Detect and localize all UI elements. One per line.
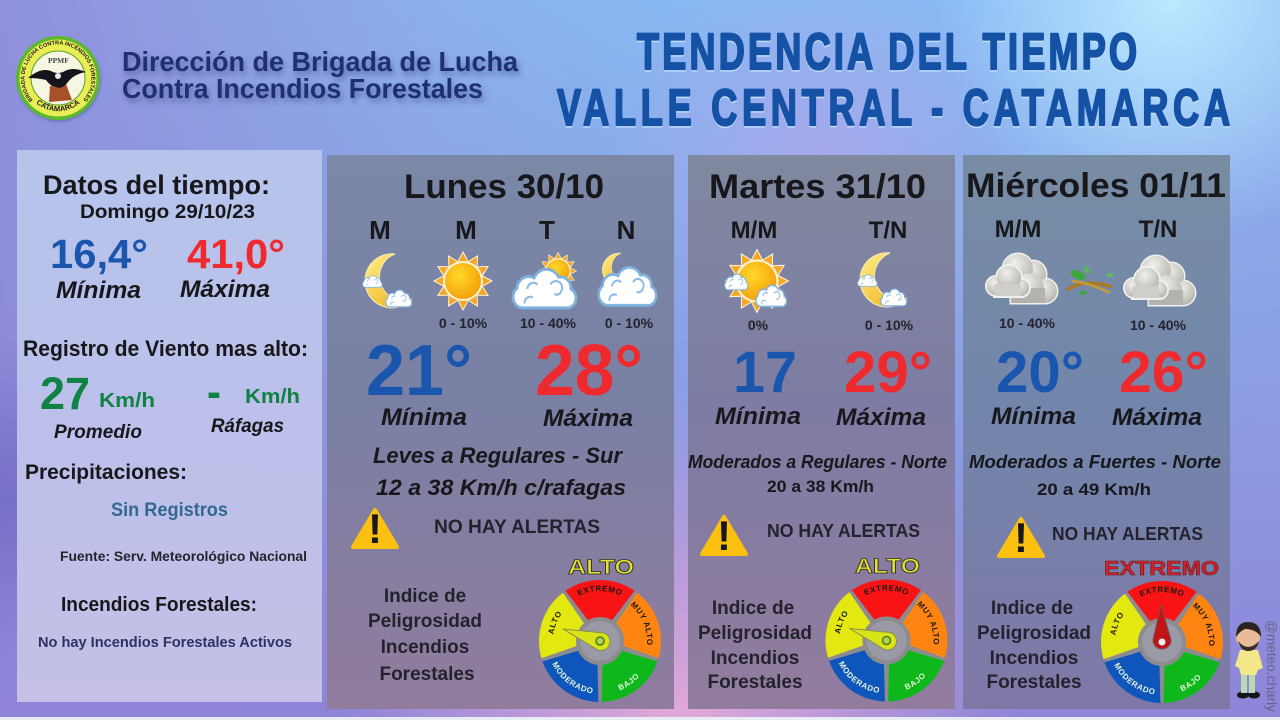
forest fires: No hay Incendios Forestales Activos [38,634,292,651]
maximum temperature: 26° [1119,340,1208,405]
heading: miercoles: Miércoles 01/11 [966,167,1226,205]
gauge: extremo [1101,558,1223,703]
alert: NO HAY ALERTAS [434,517,600,538]
fire danger label: Incendios [711,648,799,669]
alert: NO HAY ALERTAS [767,521,920,541]
minimum temperature: 17 [733,340,797,405]
icon: warning [702,512,746,559]
minimum temperature: Mínima [715,403,801,430]
period labels: T/N [869,217,907,244]
gauge: alto: BAJO [904,674,925,690]
minimum temperature: Mínima [56,277,141,304]
gauge: alto: MUY ALTO [917,601,940,644]
wind forecast: Moderados a Fuertes - Norte [969,452,1221,472]
minimum temperature: Mínima [991,403,1076,430]
gauge: alto: ALTO [548,612,561,634]
maximum temperature [1112,340,1208,431]
maximum temperature [836,340,932,431]
gauge needle [850,628,897,650]
wind forecast: 12 a 38 Km/h c/rafagas [376,475,626,500]
heading: organisation: Contra Incendios Forestales [124,77,485,108]
fire danger label: Peligrosidad [977,623,1091,644]
icon: cloud and sun [513,252,577,308]
minimum temperature: Mínima [381,404,467,431]
forest fires: Incendios Forestales: [61,594,257,616]
period labels: M [369,215,391,245]
period labels: T [539,215,555,245]
rain probabilities: 0% [748,317,769,333]
gauge: alto: BAJO [618,674,638,690]
icon: sun [434,252,492,310]
fire danger label: Peligrosidad [368,611,482,632]
period labels: M [455,215,477,245]
gauge: extremo: MODERADO [1114,662,1155,694]
heading: organisation: Dirección de Brigada de Lucha [124,50,520,81]
gauge: alto: EXTREMO [577,586,622,596]
wind average: 27 [40,368,90,419]
wind forecast: Leves a Regulares - Sur [373,443,623,468]
logo: brigade badge: BRIGADA DE LUCHA CONTRA INCENDIOS FORESTALES [20,40,96,102]
logo: brigade badge: CATAMARCA [37,100,80,112]
gauge: extremo: ALTO [1110,612,1123,636]
wind forecast [373,443,626,500]
maximum temperature: Máxima [180,276,270,303]
icon: clouds [986,254,1057,303]
gauge: extremo: EXTREMO [1104,558,1219,580]
icon: warning: ! [1014,514,1028,561]
alert [999,514,1203,561]
heading: viento: Registro de Viento mas alto: [23,336,308,361]
precipitation: Sin Registros [111,500,228,521]
icon: warning [999,514,1043,561]
maximum temperature: 41,0° [187,231,285,277]
minimum temperature: 21° [366,331,472,411]
title: VALLE CENTRAL - CATAMARCA [557,80,1230,137]
gauge: alto: ALTO [568,556,634,579]
icon: author caricature [1235,622,1263,698]
wind gusts [207,366,300,437]
gauge: alto [539,556,661,702]
fire danger label: Incendios [381,637,469,658]
icon: warning [353,505,397,552]
panel: martes 31/10 [688,155,955,709]
fire danger label: Indice de [384,586,466,607]
minimum temperature: 20° [996,340,1084,405]
maximum temperature: Máxima [1112,404,1202,431]
alert: NO HAY ALERTAS [1052,524,1203,544]
heading: organisation: Dirección de Brigada de Lucha [122,46,518,77]
maximum temperature: Máxima [836,404,926,431]
heading: organisation: Contra Incendios Forestales [122,73,483,104]
wind forecast [688,452,947,496]
alert [353,505,600,552]
fire danger label: Incendios [990,648,1078,669]
panel: miercoles 01/11 [963,155,1230,709]
heading: lunes: Lunes 30/10 [404,168,604,206]
gauge: alto: ALTO [855,555,920,578]
icon: moon with clouds [858,253,907,307]
panel: datos del tiempo [17,150,322,702]
icon: moon behind cloud [599,253,656,305]
rain probabilities [439,315,654,331]
gauge: extremo: MUY ALTO [1192,602,1215,646]
gauge: extremo: BAJO [1180,675,1200,692]
panel: lunes 30/10 [327,155,674,709]
icon: clouds [1124,256,1195,305]
heading: organisation [122,46,520,108]
rain probabilities [999,315,1187,333]
period labels: M/M [731,217,777,244]
icon: warning: ! [368,505,382,552]
rain probabilities: 0 - 10% [865,317,914,333]
rain probabilities [748,317,914,333]
gauge: alto: MODERADO [838,661,880,692]
gauge: alto: MUY ALTO [630,602,653,645]
alert [702,512,920,559]
wind average: Promedio [54,422,142,443]
title [557,24,1230,137]
heading: martes: Martes 31/10 [709,168,926,206]
gauge needle [1153,605,1171,649]
wind average [40,368,155,443]
fire danger label: Peligrosidad [698,623,812,644]
logo: brigade badge [16,36,102,122]
gauge: extremo: EXTREMO [1139,586,1184,596]
icon: warning: ! [717,512,731,559]
wind gusts: Ráfagas [211,416,284,437]
wind forecast: 20 a 49 Km/h [1037,480,1151,499]
rain probabilities: 0 - 10% [605,315,654,331]
source: Fuente: Serv. Meteorológico Nacional [60,548,307,564]
minimum temperature [50,231,148,304]
fire danger label [698,598,812,693]
period labels [731,217,907,244]
period labels [995,216,1177,243]
period labels [369,215,635,245]
icon: moon with clouds [363,254,412,308]
forest fires [38,594,292,651]
heading: datos del tiempo: Datos del tiempo: [43,170,270,200]
wind forecast: 20 a 38 Km/h [767,477,874,496]
title: TENDENCIA DEL TIEMPO [637,24,1137,81]
fire danger label: Indice de [712,598,794,619]
logo: brigade badge: PPMF [48,56,69,65]
wind gusts: - [207,366,221,417]
rain probabilities: 0 - 10% [439,315,488,331]
fire danger label: Forestales [707,672,803,693]
icon: sun with clouds [725,250,788,312]
wind average: Km/h [99,390,155,412]
maximum temperature [180,231,285,303]
fire danger label: Forestales [379,664,475,685]
gauge needle [563,629,610,651]
minimum temperature: 16,4° [50,231,148,277]
rain probabilities: 10 - 40% [1130,317,1187,333]
credit: @meteo.charly [1264,620,1280,712]
gauge: alto: EXTREMO [864,585,908,595]
date: Domingo 29/10/23 [80,202,255,223]
maximum temperature: 28° [535,331,643,411]
wind forecast [969,452,1221,499]
wind forecast: Moderados a Regulares - Norte [688,452,947,472]
precipitation: Precipitaciones: [25,461,187,484]
gauge: alto [826,555,948,702]
minimum temperature [991,340,1084,430]
rain probabilities: 10 - 40% [999,315,1056,331]
fire danger label: Indice de [991,598,1073,619]
precipitation [25,461,228,521]
period labels: M/M [995,216,1041,243]
wind gusts: Km/h [245,386,300,408]
gauge: alto: ALTO [834,611,848,634]
fire danger label: Forestales [986,672,1082,693]
period labels: N [617,215,635,245]
maximum temperature: 29° [844,340,932,405]
minimum temperature [715,340,801,430]
fire danger label [977,598,1091,693]
maximum temperature: Máxima [543,405,633,432]
gauge: alto: MODERADO [552,662,593,693]
icon: wind-blown branch [1067,265,1114,295]
period labels: T/N [1139,216,1177,243]
rain probabilities: 10 - 40% [520,315,577,331]
fire danger label [368,586,482,685]
